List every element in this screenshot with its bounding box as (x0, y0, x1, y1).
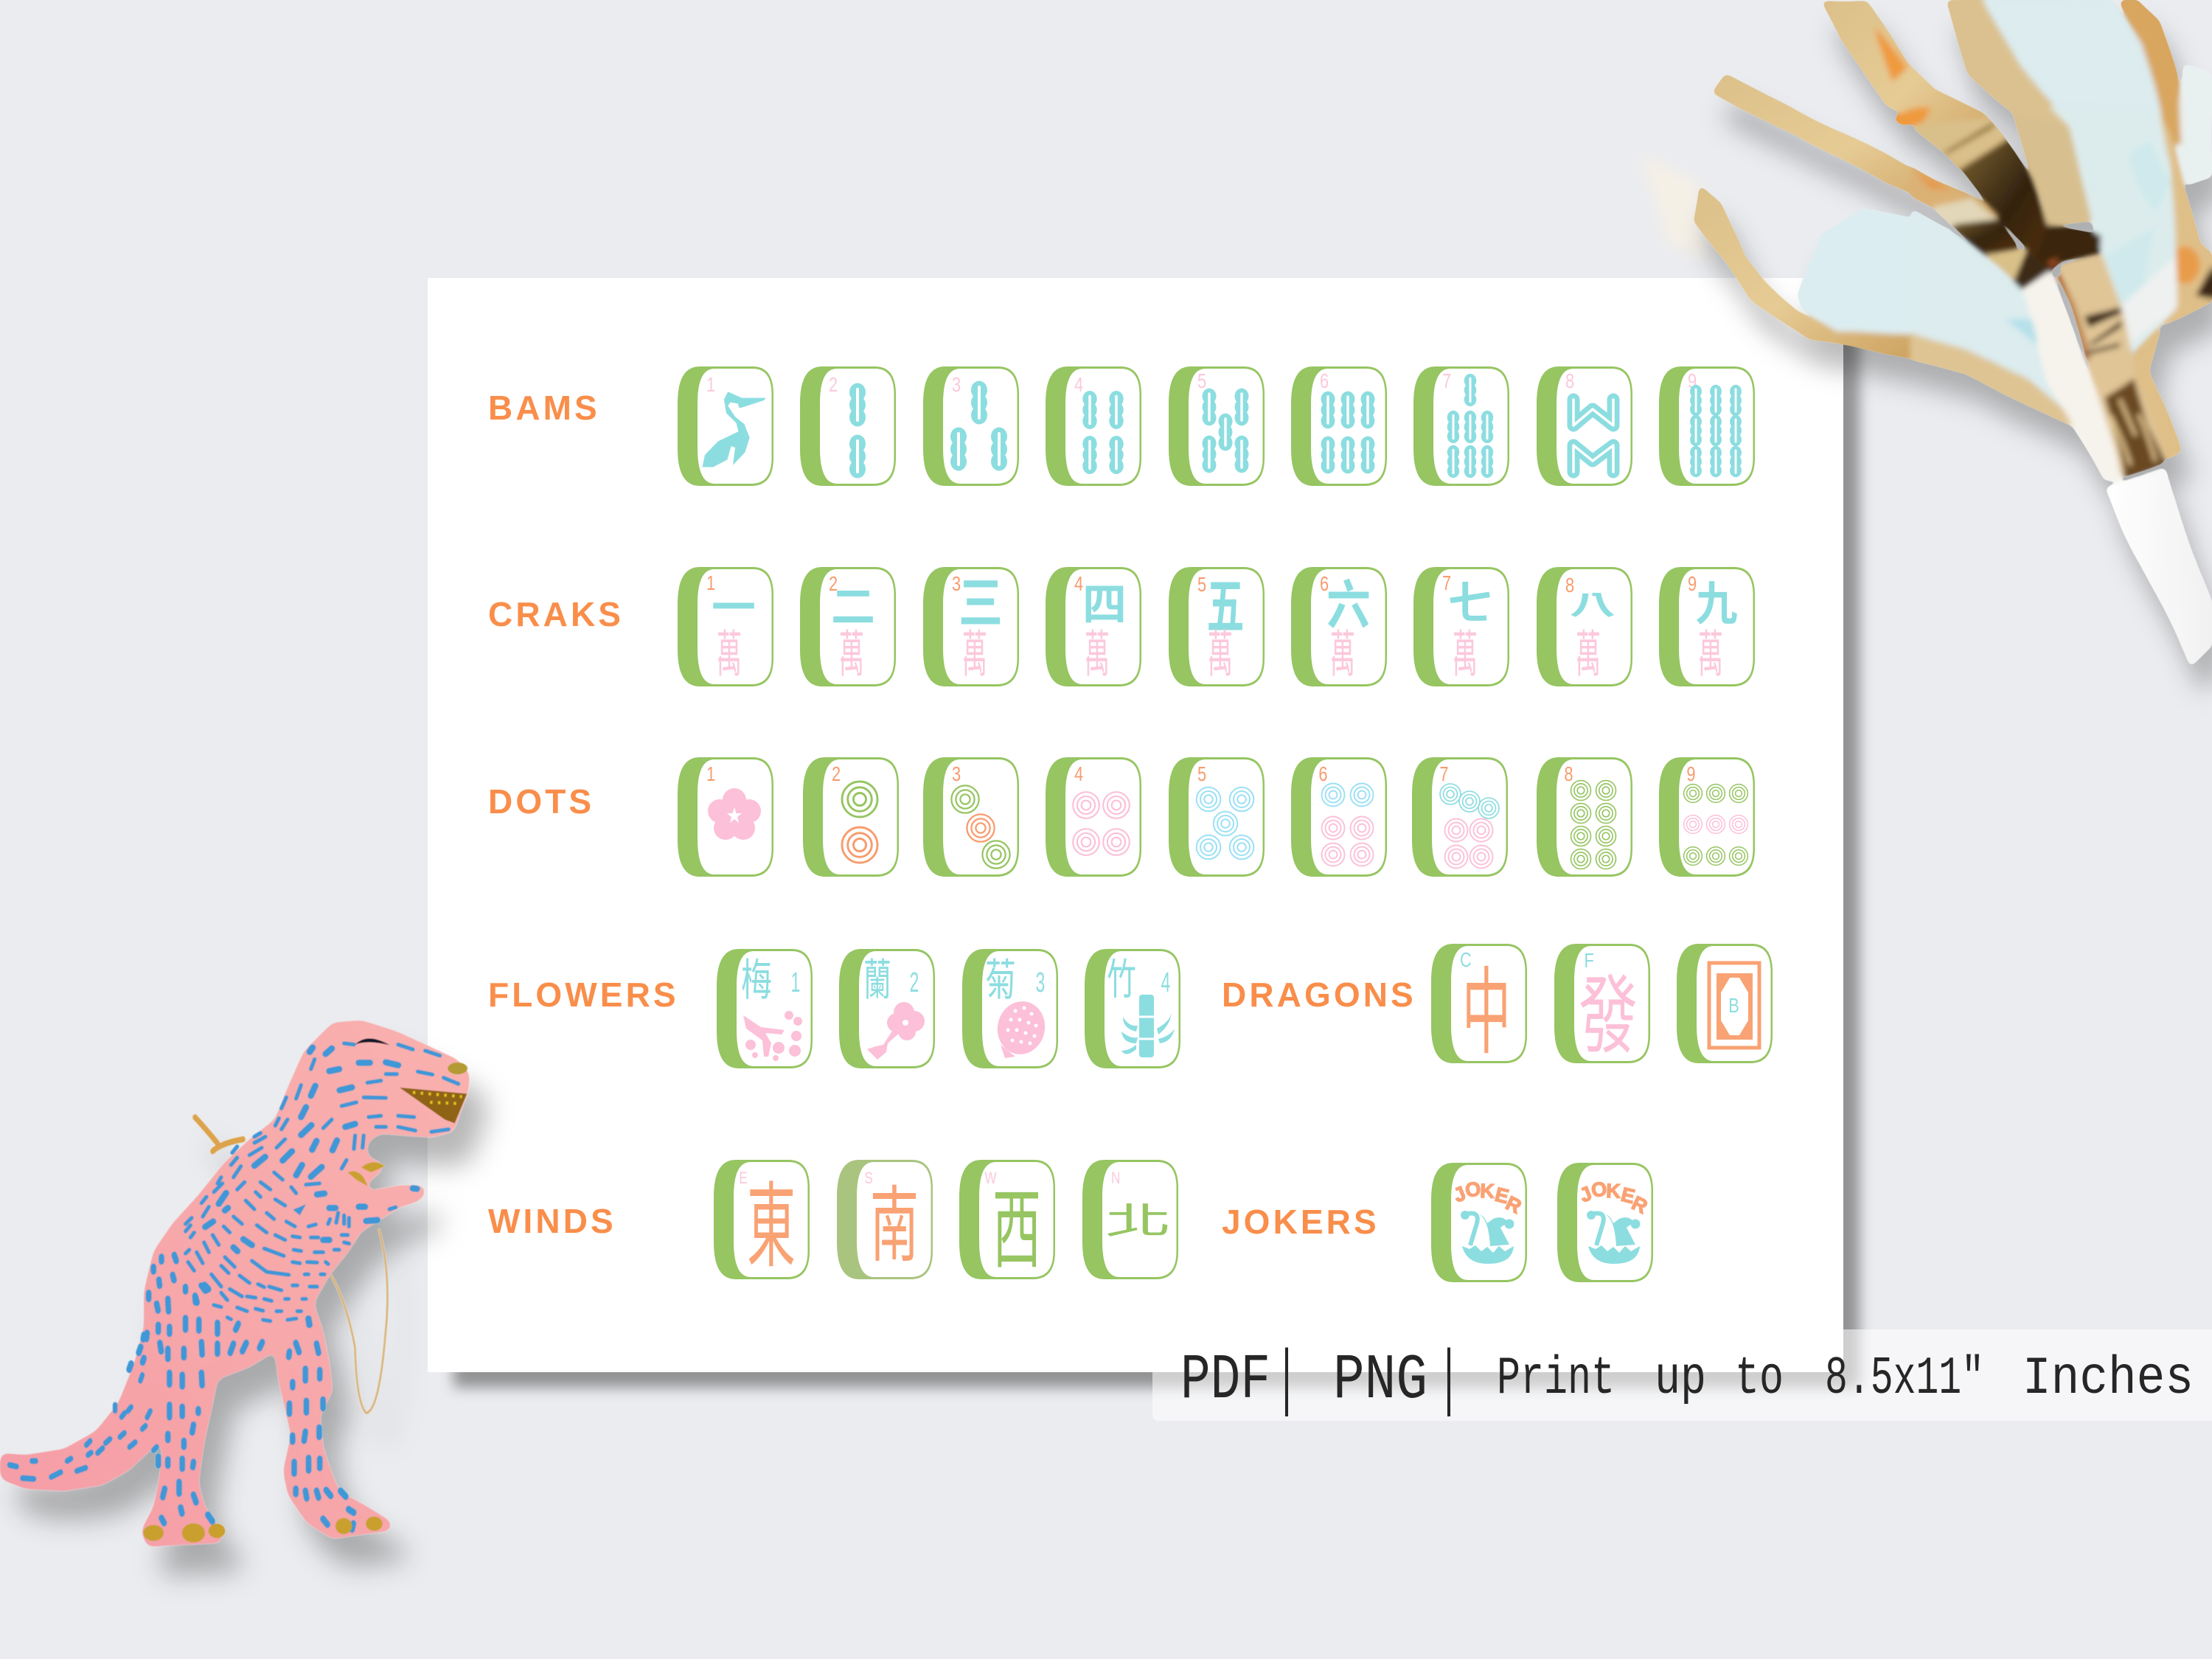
tile: bam 2: 2 (829, 373, 838, 397)
blower centre: dark ribbon A (1961, 142, 2057, 273)
tile: bam 7 (1413, 366, 1509, 486)
tile: bam 8 (1537, 366, 1632, 486)
tile: west wind (959, 1160, 1055, 1279)
text: PDF PNG print size: Print (1497, 1349, 1615, 1409)
tile: crak 1: 萬 (717, 627, 742, 683)
tile: bam 1 bird (678, 366, 773, 486)
tile: crak 4: 四 (1082, 580, 1127, 630)
tile: crak 7: 七 (1448, 579, 1492, 628)
tile: dot 6: 6 (1318, 762, 1328, 786)
tile: dot 8: 8 (1564, 762, 1573, 786)
tile: flower 3 chrysanthemum: 3 (1036, 967, 1045, 998)
text: PDF PNG print size: 8.5x11" (1825, 1349, 1984, 1409)
tile: dot 1 flower (678, 757, 773, 877)
tile: crak 2: 萬 (839, 627, 864, 683)
tile: crak 9: 九 (1696, 578, 1737, 630)
dino knot (195, 1117, 243, 1151)
tile: crak 2 (800, 567, 896, 686)
tile: bam 1 bird: 1 (706, 373, 715, 397)
tile: crak 5: 萬 (1208, 627, 1233, 683)
tile: west wind: W (984, 1169, 997, 1188)
illustration: party blower (1694, 0, 2212, 667)
tile: crak 5: 5 (1197, 573, 1206, 597)
heading: CRAKS: CRAKS (488, 595, 624, 633)
tile: north wind (1082, 1160, 1178, 1279)
tile: crak 1: 一 (712, 583, 756, 633)
blower centre: copper glint (2048, 258, 2059, 268)
blower centre: ribbon A crease (1945, 123, 1993, 153)
blower centre: gold triangle (1983, 249, 2025, 282)
text: PDF PNG print size: | (1276, 1340, 1298, 1424)
blower centre: tissue blue streak (2107, 140, 2170, 302)
tile: crak 2: 2 (829, 572, 838, 596)
blower centre: dark streaks (2084, 306, 2121, 354)
tile row: craks (678, 567, 1755, 686)
tile: bam 8: 8 (1565, 369, 1574, 393)
tile: flower 3 chrysanthemum: 菊 (985, 956, 1016, 1005)
blower centre: tissue blue patch (2003, 319, 2037, 344)
blower centre: tissue (2050, 108, 2177, 356)
tile: north wind: N (1111, 1169, 1120, 1188)
blower centre: gold right ribbon (2136, 108, 2212, 459)
tile: crak 9: 9 (1688, 572, 1697, 596)
tile: bam 4: 4 (1074, 373, 1083, 397)
tissue back right (2175, 65, 2212, 186)
tile: south wind: 南 (870, 1180, 919, 1272)
dino gold claws (143, 1517, 383, 1543)
dino body (0, 1020, 470, 1547)
tile: flower 1 plum: 梅 (741, 956, 772, 1005)
tile: crak 7 (1413, 567, 1509, 686)
blower centre: dark crossbar (2035, 223, 2101, 273)
tile: bam 6: 6 (1320, 369, 1329, 393)
tile: bam 5 (1169, 366, 1265, 486)
tile: east wind: E (739, 1169, 748, 1188)
tile: dot 7 (1412, 757, 1508, 877)
blower centre: orange ribbon end (1912, 164, 1970, 205)
tile: dot 2 (803, 757, 899, 877)
card shadow (453, 310, 1860, 1388)
tile: dot 3: 3 (952, 762, 961, 786)
tile: white dragon: B (1728, 994, 1739, 1018)
tile: west wind: 西 (992, 1182, 1041, 1279)
tile: dot 4: 4 (1074, 762, 1083, 786)
tile: flower 2 orchid: 蘭 (863, 956, 891, 1005)
tile: joker 1 (1431, 1163, 1527, 1282)
tile: dot 2: 2 (832, 762, 841, 786)
heading: JOKERS: JOKERS (1222, 1203, 1380, 1241)
blower centre: crumpled foil (2107, 378, 2163, 477)
tile: north wind: 北 (1105, 1201, 1172, 1242)
tile: bam 4 (1046, 366, 1141, 486)
tile: flower 4 bamboo: 4 (1161, 967, 1170, 998)
tile: bam 3: 3 (952, 373, 961, 397)
tile: flower 2 orchid (839, 949, 935, 1068)
heading: DOTS: DOTS (488, 782, 594, 821)
dino eye (355, 1038, 389, 1045)
gold streamer top middle (1946, 0, 2070, 151)
tile: joker 2: JOKER (1576, 1178, 1651, 1218)
tile row: dots (678, 757, 1755, 877)
tile: white dragon (1677, 944, 1773, 1063)
fading streamer end (1641, 153, 1714, 262)
dino lower blue spots (129, 1255, 354, 1529)
tile: flower 1 plum: 1 (791, 967, 800, 998)
blower centre: dark right fold (2195, 258, 2212, 300)
tile: dot 4 (1046, 757, 1141, 877)
blower centre: cream band (1934, 198, 1996, 224)
tile: dot 9: 9 (1686, 762, 1696, 786)
blower centre: tissue white fold (2121, 256, 2177, 348)
tile: crak 8 (1537, 567, 1632, 686)
text: PDF PNG print size: PNG (1333, 1344, 1427, 1416)
tile: crak 9 (1659, 567, 1755, 686)
blower centre: gold ribbon A top (1912, 118, 2006, 167)
gold long streamer (1712, 74, 1998, 216)
blower stick (2105, 467, 2212, 667)
tile: green dragon: 發 (1579, 969, 1638, 1065)
text: PDF PNG print size: up (1655, 1349, 1706, 1409)
gold lower streamer left (1694, 186, 1942, 364)
tile: bam 9 (1659, 366, 1755, 486)
blower centre: dark lower left (1953, 219, 2017, 256)
text: PDF PNG print size: | (1438, 1340, 1460, 1424)
blower centre: dark wedge (2011, 251, 2050, 291)
tile: bam 3 (923, 366, 1019, 486)
tile: green dragon (1554, 944, 1650, 1065)
gold streamer top left (1821, 0, 2006, 169)
tile: crak 5: 五 (1207, 574, 1244, 641)
tile: crak 7: 萬 (1453, 627, 1478, 683)
tile: dot 9 (1659, 757, 1755, 877)
tile: red dragon: C (1460, 948, 1472, 972)
banner: file formats (1152, 1329, 2212, 1424)
tile: crak 4: 萬 (1085, 627, 1110, 683)
blower centre: orange blob (2168, 246, 2199, 282)
tile: dot 7: 7 (1439, 762, 1449, 786)
tile: dot 6 (1291, 757, 1387, 877)
tile: bam 9: 9 (1688, 369, 1697, 393)
dino arm claws (348, 1162, 385, 1186)
dino arm triangle (293, 1204, 306, 1215)
tile: crak 6 (1291, 567, 1387, 686)
tile: south wind: S (864, 1169, 873, 1188)
tile: bam 2 (800, 366, 896, 486)
tile: crak 4: 4 (1074, 572, 1083, 596)
tile: crak 6: 6 (1320, 572, 1329, 596)
gold streamer orange highlight (1874, 26, 1930, 123)
tile row: flowers (717, 949, 1180, 1068)
tile row: dragons (1431, 944, 1773, 1066)
tile: bam 7: 7 (1442, 369, 1451, 393)
blower centre: lower tissue (1912, 208, 2065, 411)
tissue upper top (1983, 0, 2163, 147)
tile: dot 8 (1537, 757, 1632, 877)
tile: dot 5: 5 (1197, 762, 1206, 786)
tile: south wind (837, 1160, 933, 1279)
tile: dot 3 (923, 757, 1019, 877)
tile: flower 3 chrysanthemum (962, 949, 1058, 1068)
tile: dot 5 (1169, 757, 1265, 877)
tile: east wind (714, 1160, 810, 1279)
tile: east wind: 東 (747, 1175, 796, 1279)
tile: crak 4 (1046, 567, 1141, 686)
dino upper blue spots thin (186, 1043, 459, 1326)
tile: joker 2 (1557, 1163, 1653, 1282)
tile: crak 1 (678, 567, 773, 686)
dino tail spots (10, 1375, 157, 1479)
tile: flower 1 plum (717, 949, 813, 1068)
tile: bam 5: 5 (1197, 369, 1206, 393)
heading: WINDS: WINDS (488, 1202, 616, 1240)
illustration: pink dinosaur (0, 1020, 470, 1547)
tile: joker 1: JOKER (1450, 1178, 1525, 1218)
tile: crak 6: 六 (1326, 577, 1371, 636)
tile: crak 1: 1 (706, 571, 715, 595)
tile: crak 3 (923, 567, 1019, 686)
gold streamer back right top (2118, 0, 2183, 143)
tile row: winds (714, 1160, 1178, 1279)
blower centre: white paper strip (2020, 273, 2121, 481)
panel: white tile sheet (428, 278, 1843, 1372)
tile: crak 8: 八 (1569, 591, 1616, 620)
tile: crak 9: 萬 (1698, 627, 1723, 683)
tissue lower left (1799, 208, 1942, 342)
blower centre: gold ribbon B (2013, 113, 2092, 223)
blower centre: gold main foil (2061, 256, 2163, 479)
tile: crak 3: 3 (952, 572, 961, 596)
tile row: jokers (1431, 1163, 1653, 1282)
dino nose gold (448, 1062, 467, 1074)
tile: flower 2 orchid: 2 (910, 967, 919, 998)
text: PDF PNG print size: to (1735, 1349, 1784, 1409)
text: PDF PNG print size: Inches (2023, 1349, 2194, 1409)
tile: dot 1 flower: 1 (706, 762, 715, 786)
tile: crak 8: 萬 (1576, 627, 1601, 683)
tile: crak 3: 三 (959, 574, 1003, 635)
tile: bam 6 (1291, 366, 1387, 486)
blower centre: copper edge (2057, 275, 2092, 359)
blower centre: lower gold ribbon (1912, 332, 2077, 430)
tile: flower 4 bamboo: 竹 (1107, 956, 1136, 1004)
tile: crak 2: 二 (831, 582, 875, 632)
tile: crak 7: 7 (1442, 571, 1451, 595)
tile: crak 3: 萬 (962, 627, 987, 683)
tile: crak 8: 8 (1565, 574, 1574, 597)
dino gold mouth (400, 1088, 467, 1123)
tile: green dragon: F (1585, 949, 1594, 973)
tile: crak 6: 萬 (1330, 627, 1355, 683)
text: PDF PNG print size (1180, 1340, 2194, 1424)
tile row: bams (678, 366, 1755, 486)
dino mouth glitter (413, 1093, 462, 1104)
dino string loop (331, 1229, 387, 1413)
heading: DRAGONS: DRAGONS (1222, 975, 1416, 1014)
dino upper blue spots fat (195, 1048, 417, 1325)
tile: flower 4 bamboo (1085, 949, 1180, 1068)
tile: red dragon: 中 (1462, 959, 1511, 1066)
heading: FLOWERS: FLOWERS (488, 975, 679, 1014)
blower centre: crumple highlights (2111, 400, 2153, 465)
heading: BAMS: BAMS (488, 389, 600, 427)
text: PDF PNG print size: PDF (1180, 1344, 1270, 1416)
blower centre: orange highlight (1917, 170, 1954, 189)
tile: red dragon (1431, 944, 1527, 1066)
tile: crak 5 (1169, 567, 1265, 686)
